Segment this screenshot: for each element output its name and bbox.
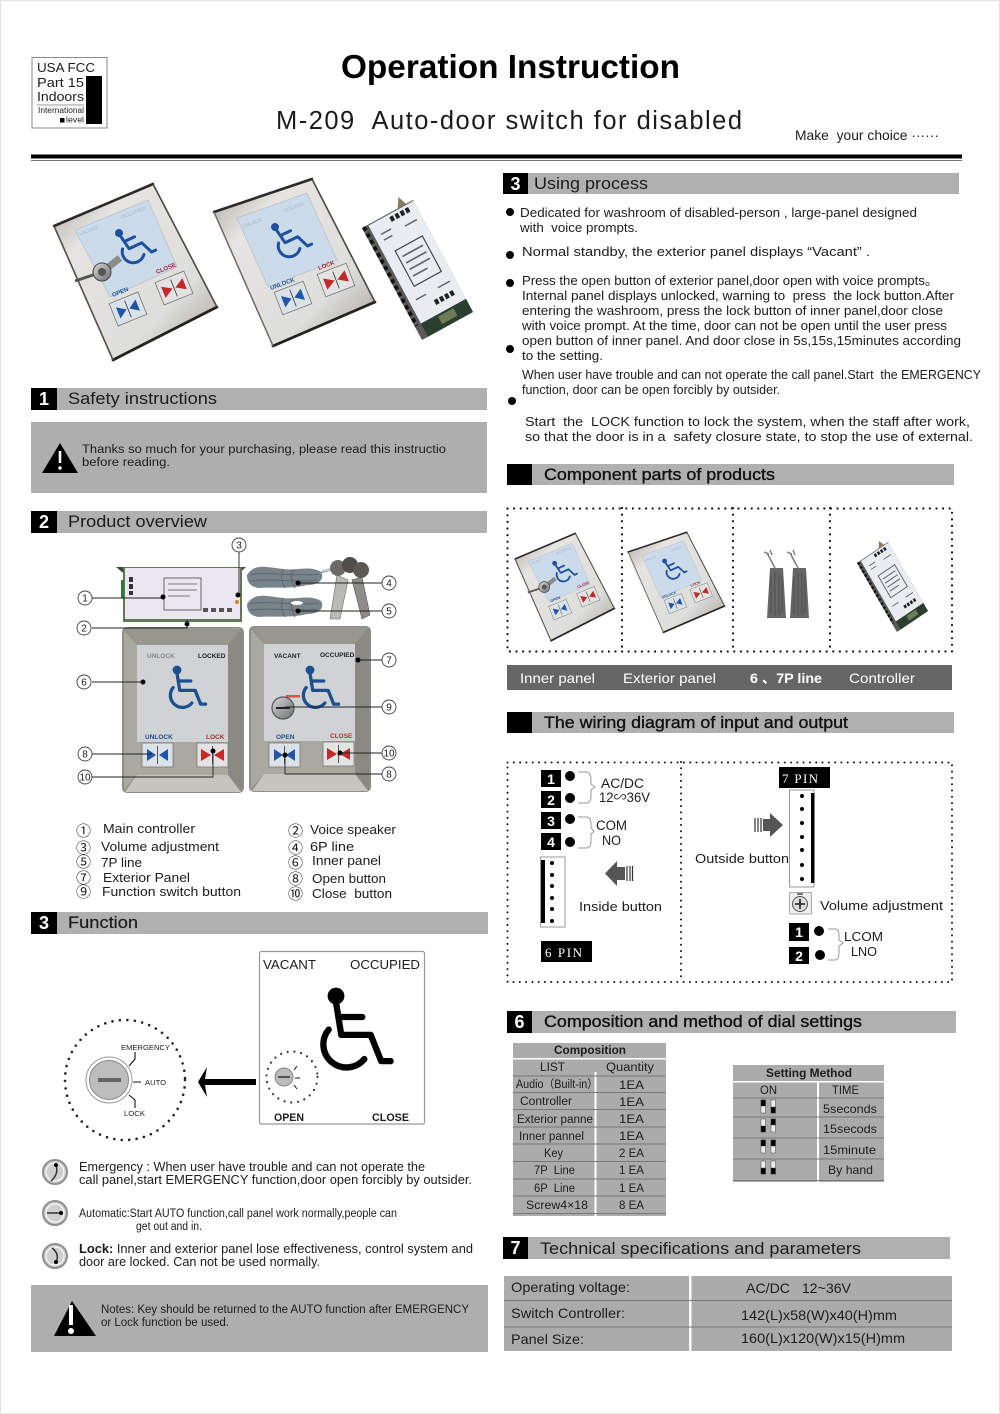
icon: 6 and 7P cables [764,550,809,618]
product overview diagram: 1 [82,594,88,604]
header rule [31,154,962,161]
legend: part names: Close button [312,886,392,901]
logo: USA FCC badge: Part 15 [37,75,84,90]
logo: USA FCC badge: level [66,116,84,124]
icon: warning triangle [54,1301,96,1336]
table: technical specifications: Panel Size: [511,1331,584,1347]
table: technical specifications: Operating voltage: [511,1279,630,1295]
table: composition [513,1043,666,1216]
product overview diagram: 6 [81,678,87,688]
legend: part names: ③ [76,840,91,857]
label: volume adjustment: Volume adjustment [820,898,943,913]
table: setting method: Setting Method [766,1066,852,1080]
product overview diagram [77,538,396,793]
text: lock: Lock: Inner and exterior panel lose effectiveness, control system and [79,1242,473,1256]
text: lock [79,1242,473,1269]
text block: using process: Dedicated for washroom of disabled-person , large-panel designed [520,206,917,220]
product overview diagram: 2 [81,624,87,634]
section bar: component parts [507,464,954,485]
table: composition: Key [544,1148,563,1160]
text block: using process: When user have trouble and can not operate the call panel.Start the EMERGENCY [522,368,982,382]
label: inside button: Inside button [579,899,662,914]
icon: exterior panel with key [54,184,217,360]
section bar: product overview [31,511,487,533]
table: composition: Inner pannel [519,1131,584,1143]
table: setting method [733,1065,884,1182]
lock terminals: 1 [795,924,803,940]
icon: inner panel front: LOCKED [198,653,226,660]
section bar: product overview: Product overview [68,513,207,531]
product photo: panels and controller [54,179,473,360]
key switch detail [65,1020,185,1140]
text block: using process: Press the open button of exterior panel,door open with voice prompts。 [522,274,938,288]
product overview diagram: 7 [386,656,392,666]
table: composition: 1EA [619,1097,644,1109]
product overview diagram: 3 [236,540,242,552]
icons: DIP switch positions [761,1100,776,1174]
text block: using process: Internal panel displays unlocked, warning to press the lock button.After [522,289,954,303]
caption bar: component names: Inner panel [520,670,595,686]
text: automatic: get out and in. [136,1221,202,1233]
legend: part names [76,821,397,903]
title: Operation Instruction [341,49,680,86]
table: setting method: 15secods [823,1122,877,1136]
section bar: dial settings [507,1011,956,1033]
icon: exterior panel front [249,626,371,792]
connector: 6 pin [540,857,592,962]
legend: part names: ⑥ [288,855,303,872]
panel: line drawing of exterior panel: VACANT [263,957,316,972]
text block: using process: Normal standby, the exterior panel displays “Vacant” . [522,245,870,259]
table: technical specifications: 160(L)x120(W)x15(H)mm [741,1330,905,1346]
legend: part names: Main controller [103,821,196,836]
product overview diagram: 9 [386,702,392,714]
icon: exterior panel front: OCCUPIED [320,652,355,659]
table: composition: 7P Line [534,1165,575,1177]
table: technical specifications: Switch Controller: [511,1305,625,1321]
table: composition: Audio（Built-in） [516,1078,598,1091]
text block: using process: to the setting. [522,349,603,363]
text: lock: door are locked. Can not be used normally. [79,1255,320,1269]
icon: exterior panel photo [628,532,725,632]
arrow: zoom to key switch [198,1067,256,1097]
icon: controller [358,192,473,340]
legend: part names: ⑧ [288,871,303,888]
tagline: Make your choice ······ [795,127,939,143]
legend: part names: Inner panel [312,853,381,868]
caption bar: component names [507,665,952,690]
text: emergency: Emergency : When user have trouble and can not operate the [79,1160,425,1174]
section bar: dial settings: Composition and method of dial settings [544,1013,862,1031]
table: composition: 1 EA [619,1165,644,1177]
logo: USA FCC badge: Indoors [37,89,85,104]
connector: 7 pin: 7 PIN [782,771,819,786]
callout lines [92,552,382,777]
legend: part names: Open button [312,871,386,886]
text block: using process: so that the door is in a safety closure state, to stop the use of external. [525,430,973,444]
table: composition: 1EA [619,1131,644,1143]
lock terminals [789,923,883,964]
icon: inner panel front: UNLOCK [145,734,173,741]
connector: 7 pin [779,767,830,887]
legend: part names: ② [288,823,303,840]
legend: part names: ④ [288,840,303,857]
panel: notes: or Lock function be used. [101,1317,229,1329]
table: composition: 6P Line [534,1183,575,1195]
logo: USA FCC badge: International [38,106,84,115]
table: composition: Screw4×18 [526,1200,588,1212]
section bar: wiring diagram [507,712,954,733]
text block: using process: Start the LOCK function to lock the system, when the staff after work, [525,415,970,429]
lock terminals: LCOM [844,929,883,944]
table: composition: Composition [554,1043,626,1057]
section bar: function: Function [68,914,138,932]
section bar: safety instructions [31,388,487,410]
section bar: technical specifications: 7 [510,1238,521,1258]
icon: exterior panel front: VACANT [274,653,301,660]
table: composition: Controller [520,1096,572,1108]
table: setting method: By hand [828,1163,873,1177]
label: outside button: Outside button [695,851,789,866]
section bar: component parts: Component parts of products [544,466,775,484]
input terminals 1-4: 12∽36V [599,790,650,805]
table: setting method: 15minute [823,1143,876,1157]
icon: exterior panel front: CLOSE [330,733,353,740]
table: composition: 1EA [619,1080,644,1092]
text block: using process: with voice prompt. At the time, door can not be open until the user press [521,319,947,333]
section bar: technical specifications: Technical specifications and parameters [540,1240,861,1258]
legend: part names: ⑨ [76,884,91,901]
input terminals 1-4: NO [602,833,621,848]
section bar: function: 3 [39,913,49,933]
section bar: technical specifications [503,1237,950,1259]
caption bar: component names: Exterior panel [623,670,716,686]
section bar: using process: Using process [534,175,648,193]
legend: part names: ① [76,823,91,840]
panel: safety notice: Thanks so much for your purchasing, please read this instructio [82,444,446,456]
text: automatic [79,1208,397,1233]
legend: part names: ⑦ [76,870,91,887]
text block: using process: function, door can be open forcibly by outsider. [522,383,780,397]
numbered callouts [77,538,396,784]
key switch detail: EMERGENCY [121,1043,170,1052]
icon: inner panel front: UNLOCK [147,653,175,660]
key switch detail: AUTO [145,1078,166,1087]
input terminals 1-4 [541,770,650,850]
text: automatic: Automatic:Start AUTO function,call panel work normally,people can [79,1208,397,1220]
section bar: safety instructions: 1 [39,389,49,409]
legend: part names: ⑩ [288,886,303,903]
logo: USA FCC badge [32,58,107,128]
table: setting method: TIME [832,1083,859,1097]
input terminals 1-4: 4 [547,834,555,850]
icon: lock position [43,1244,67,1268]
arrow: inside button [605,861,632,886]
bullets [506,208,516,405]
logo: USA FCC badge: USA FCC [37,60,95,75]
text block: using process: open button of inner panel. And door close in 5s,15s,15minutes according [522,334,961,348]
table: technical specifications: 142(L)x58(W)x40(H)mm [741,1307,897,1323]
text block: using process [506,206,982,444]
subtitle: M-209 Auto-door switch for disabled [276,107,742,135]
section bar: using process [503,173,959,194]
input terminals 1-4: 2 [547,792,555,808]
section bar: wiring diagram: The wiring diagram of input and output [544,714,848,732]
legend: part names: Function switch button [102,884,241,899]
text: emergency [79,1160,472,1187]
section bar: dial settings: 6 [514,1012,525,1032]
table: setting method: 5seconds [823,1102,877,1116]
icon: inner panel front: LOCK [206,734,225,741]
section bar: safety instructions: Safety instructions [68,390,217,408]
lock terminals: LNO [851,944,877,959]
table: composition: LIST [540,1062,565,1074]
product overview diagram: 5 [386,606,392,618]
table: setting method: ON [760,1083,777,1097]
input terminals 1-4: 1 [547,771,555,787]
icon: controller photo [854,537,928,632]
icon: volume adjustment [790,892,812,914]
table: composition: 1 EA [619,1183,644,1195]
legend: part names: Volume adjustment [101,839,219,854]
panel: line drawing of exterior panel: OPEN [274,1112,304,1124]
connector: 6 pin: 6 PIN [545,945,583,960]
function switch diagram [65,952,424,1140]
text block: using process: with voice prompts. [519,221,638,235]
panel: line drawing of exterior panel: CLOSE [372,1112,409,1124]
table: composition: Exterior panne [517,1114,593,1126]
icon: inner panel photo [515,533,614,641]
legend: part names: 7P line [101,855,142,870]
panel: component parts [508,508,952,652]
table: composition: Quantity [606,1062,654,1074]
text: emergency: call panel,start EMERGENCY function,door open forcibly by outsider. [79,1173,472,1187]
product overview diagram: 4 [386,578,392,590]
panel: safety notice: before reading. [82,457,170,469]
product overview diagram: 8 [82,750,88,760]
caption bar: component names: Controller [849,670,915,686]
panel: line drawing of exterior panel: OCCUPIED [350,957,420,972]
icon: inner panel front [122,627,244,793]
product overview diagram: 10 [383,748,395,760]
table: technical specifications [504,1276,952,1351]
icon: keys [330,557,370,619]
icon: emergency position [43,1160,67,1184]
table: composition: 2 EA [619,1148,644,1160]
input terminals 1-4: 3 [547,813,555,829]
wiring diagram [508,762,952,982]
table: technical specifications: AC/DC 12~36V [746,1280,852,1296]
arrow: outside button [755,813,783,837]
table: composition: 1EA [619,1114,644,1126]
panel: safety notice [31,422,487,493]
input terminals 1-4: AC/DC [601,776,644,791]
product overview diagram: 10 [79,772,91,784]
section bar: using process: 3 [510,174,521,194]
icon: exterior panel front: OPEN [276,734,295,741]
legend: part names: ⑤ [76,854,91,871]
panel: line drawing of exterior panel [260,952,424,1124]
panel: notes: Notes: Key should be returned to the AUTO function after EMERGENCY [101,1304,469,1316]
icon: cable 7P [247,596,322,617]
icon: controller board [116,567,246,622]
caption bar: component names: 6 、7P line [750,670,822,686]
legend: part names: 6P line [310,839,354,854]
input terminals 1-4: COM [596,818,627,833]
text block: using process: entering the washroom, press the lock button of inner panel,door close [522,304,943,318]
section bar: product overview: 2 [39,512,49,532]
legend: part names: Voice speaker [310,822,397,837]
table: composition: 8 EA [619,1200,644,1212]
legend: part names: Exterior Panel [103,870,190,885]
product overview diagram: 8 [386,770,392,780]
icon: auto position [43,1201,67,1225]
section bar: function [31,912,488,934]
icon: warning triangle [42,443,78,473]
lock terminals: 2 [795,948,803,964]
panel: notes [31,1285,488,1352]
key switch detail: LOCK [124,1109,145,1118]
icon: inner panel [214,179,375,346]
icon: cable 6P [247,564,342,588]
